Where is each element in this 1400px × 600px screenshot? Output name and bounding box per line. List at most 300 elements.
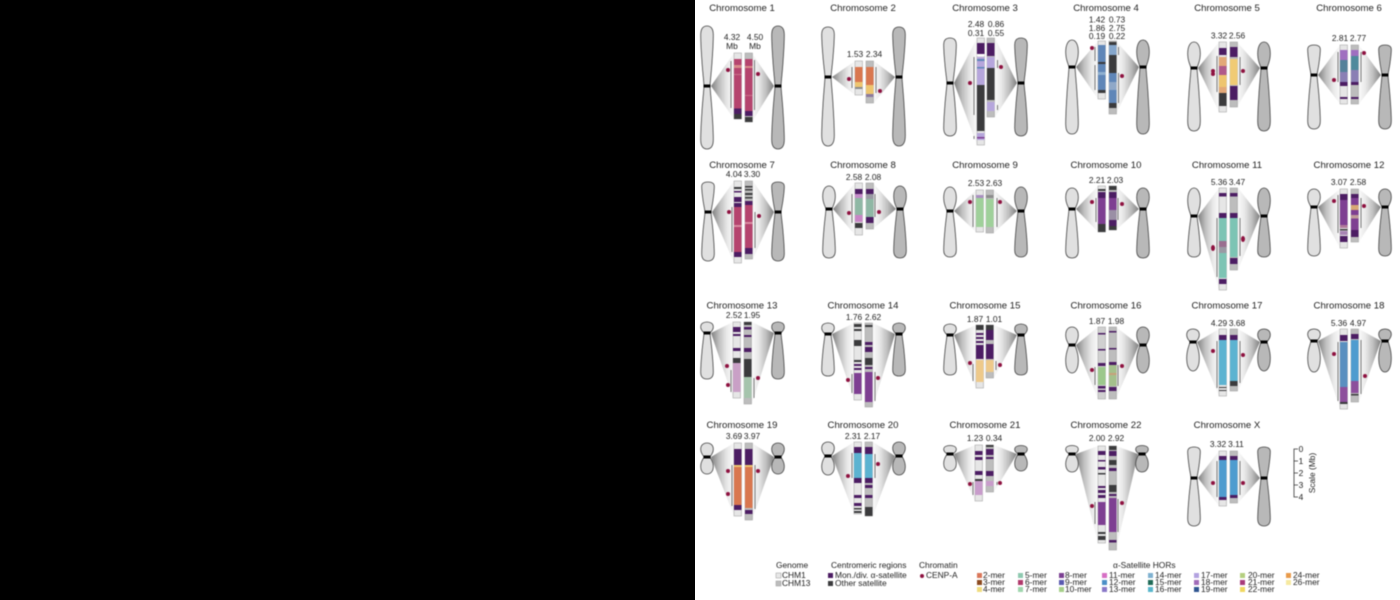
sizes: [1211, 318, 1245, 328]
CHM1 chromosome: [1066, 446, 1078, 472]
zoom fans: [832, 442, 895, 516]
brackets and CENP-A: [726, 60, 760, 110]
zoom fans: [1198, 188, 1260, 290]
brackets and CENP-A: [725, 364, 760, 398]
sizes: 0.86: [988, 19, 1004, 29]
legend: alpha-satellite HORs: 22-mer: [1248, 584, 1275, 594]
brackets and CENP-A: [968, 481, 1002, 495]
CHM13 chromosome: [1258, 42, 1270, 131]
CHM1 chromosome: [1308, 189, 1320, 256]
panel: chromosome 3: [944, 3, 1027, 145]
panel: chromosome 2: [822, 3, 905, 146]
zoom fans: [1198, 42, 1260, 112]
CHM13 array: [865, 442, 872, 516]
CHM1 array: [734, 53, 742, 119]
sizes: [967, 433, 1002, 443]
title: Chromosome 3: [952, 3, 1018, 14]
brackets and CENP-A: [1090, 499, 1124, 532]
sizes: Mb: [726, 41, 738, 51]
CHM1 array: [975, 445, 982, 501]
sizes: 2.62: [865, 312, 881, 322]
legend: alpha-satellite HORs: 15-mer: [1155, 577, 1182, 587]
CHM13 chromosome: [1137, 188, 1149, 258]
legend: alpha-satellite HORs: 9-mer: [1065, 577, 1087, 587]
sizes: 2.92: [1108, 433, 1124, 443]
CHM13 array: [1230, 451, 1238, 503]
sizes: [1211, 30, 1245, 40]
CHM1 array: [1219, 451, 1226, 506]
title: Chromosome 5: [1194, 3, 1260, 14]
scale bar: 0: [1299, 444, 1304, 454]
scale bar: Scale (Mb): [1307, 453, 1317, 493]
panel: chromosome 16: [1066, 300, 1149, 399]
zoom fans: [833, 183, 896, 235]
CHM1 chromosome: [1308, 45, 1320, 129]
CHM13 array: [1230, 42, 1238, 107]
legend: alpha-satellite HORs: 14-mer: [1155, 570, 1182, 580]
CHM13 chromosome: [1015, 187, 1027, 257]
title: Chromosome 16: [1071, 300, 1141, 312]
panel: chromosome 17: [1187, 300, 1270, 396]
CHM13 array: [1351, 329, 1358, 402]
zoom fans: [711, 443, 774, 520]
CHM13 chromosome: [1258, 447, 1270, 526]
sizes: [968, 178, 1002, 188]
scale bar: 4: [1299, 492, 1304, 502]
brackets and CENP-A: [968, 195, 1002, 227]
CHM1 chromosome: [944, 324, 956, 375]
CHM1 chromosome: [1066, 40, 1078, 134]
sizes: [967, 314, 1002, 324]
figure: [701, 3, 1391, 594]
sizes: 2.58: [846, 172, 862, 182]
CHM13 array: [865, 323, 872, 407]
sizes: 2.58: [1350, 177, 1366, 187]
CHM13 array: [745, 53, 752, 122]
sizes: [845, 431, 880, 441]
panel: chromosome 7: [702, 160, 784, 263]
CHM13 array: [986, 445, 994, 492]
CHM1 chromosome: [1188, 188, 1200, 257]
CHM13 array: [1351, 189, 1358, 242]
sizes: 2.31: [845, 431, 861, 441]
CHM1 chromosome: [1187, 329, 1199, 371]
CHM1 chromosome: [1188, 42, 1200, 131]
legend: alpha-satellite HORs: 19-mer: [1201, 584, 1228, 594]
sizes: 3.68: [1229, 318, 1245, 328]
CHM13 array: [866, 183, 874, 229]
legend: alpha-satellite HORs: 12-mer: [1109, 577, 1136, 587]
brackets and CENP-A: [1090, 198, 1124, 222]
sizes: 3.97: [744, 431, 760, 441]
zoom fans: [711, 53, 774, 122]
legend: chromatin: CENP-A: [926, 570, 958, 580]
zoom fans: [1198, 451, 1260, 506]
title: Chromosome 22: [1071, 420, 1141, 431]
legend: centromeric regions: Centromeric regions: [831, 560, 906, 570]
zoom fans: [954, 190, 1017, 233]
scale bar: [1294, 444, 1317, 502]
title: Chromosome 17: [1192, 300, 1262, 312]
sizes: [1211, 177, 1245, 187]
CHM13 chromosome: [1258, 329, 1270, 371]
CHM13 chromosome: [1379, 189, 1391, 256]
panel: chromosome 20: [822, 420, 905, 516]
brackets and CENP-A: [1211, 341, 1245, 388]
sizes: 2.00: [1089, 433, 1105, 443]
sizes: [1089, 175, 1123, 185]
CHM1 chromosome: [702, 182, 714, 261]
title: Chromosome 19: [707, 420, 777, 431]
legend: alpha-satellite HORs: 16-mer: [1155, 584, 1182, 594]
CHM13 chromosome: [893, 442, 905, 475]
zoom fans: [1318, 45, 1381, 104]
sizes: 4.04: [726, 169, 742, 179]
brackets and CENP-A: [1090, 364, 1124, 386]
panel: chromosome 14: [822, 300, 905, 407]
CHM1 array: [855, 61, 862, 95]
brackets and CENP-A: [846, 372, 880, 401]
panel: chromosome 10: [1066, 160, 1149, 258]
CHM13 chromosome: [1137, 327, 1149, 373]
CHM13 array: [987, 38, 994, 117]
legend: alpha-satellite HORs: 26-mer: [1293, 577, 1320, 587]
sizes: 3.32: [1211, 30, 1227, 40]
CHM1 array: [977, 38, 984, 145]
title: Chromosome 12: [1314, 160, 1384, 171]
brackets and CENP-A: [726, 465, 760, 509]
legend: alpha-satellite HORs: [977, 560, 1320, 594]
legend: alpha-satellite HORs: 21-mer: [1248, 577, 1275, 587]
CHM1 chromosome: [701, 26, 713, 149]
CHM13 array: [1109, 186, 1116, 230]
sizes: 1.76: [846, 312, 862, 322]
panel: chromosome X: [1188, 420, 1270, 526]
panel: chromosome 9: [944, 160, 1027, 257]
sizes: 2.77: [1350, 33, 1366, 43]
sizes: [1089, 316, 1124, 326]
CHM1 array: [734, 443, 742, 516]
CHM1 array: [976, 190, 984, 232]
CHM1 chromosome: [822, 323, 834, 376]
CHM1 chromosome: [823, 186, 835, 258]
sizes: 2.75: [1109, 23, 1125, 33]
CHM13 chromosome: [893, 323, 905, 376]
sizes: 5.36: [1331, 318, 1347, 328]
sizes: [1210, 439, 1244, 449]
sizes: 1.87: [967, 314, 983, 324]
CHM13 array: [986, 325, 994, 378]
CHM13 chromosome: [894, 186, 906, 258]
sizes: [846, 172, 881, 182]
CHM1 chromosome: [944, 38, 956, 136]
legend: alpha-satellite HORs: 6-mer: [1025, 577, 1047, 587]
brackets and CENP-A: [846, 453, 880, 478]
CHM1 array: [1340, 45, 1348, 104]
title: Chromosome 2: [830, 3, 896, 14]
CHM1 array: [854, 442, 862, 514]
panel: chromosome 18: [1308, 300, 1391, 409]
sizes: [1332, 33, 1366, 43]
CHM13 chromosome: [893, 27, 905, 146]
title: Chromosome 18: [1314, 300, 1384, 312]
title: Chromosome 14: [828, 300, 899, 312]
title: Chromosome 21: [950, 420, 1020, 431]
zoom fans: [1076, 186, 1139, 232]
zoom fans: [954, 38, 1017, 145]
CHM1 array: [1219, 329, 1226, 396]
sizes: 1.98: [1108, 316, 1124, 326]
title: Chromosome 11: [1192, 160, 1262, 171]
panel: chromosome 22: [1066, 420, 1148, 550]
legend: alpha-satellite HORs: 18-mer: [1201, 577, 1228, 587]
legend: genome: CHM1: [782, 570, 806, 580]
sizes: [847, 49, 882, 59]
CHM1 chromosome: [701, 443, 713, 474]
sizes: 2.21: [1089, 175, 1105, 185]
scale bar: 1: [1299, 456, 1304, 466]
zoom fans: [1076, 41, 1139, 114]
CHM1 chromosome: [701, 322, 713, 379]
CHM13 chromosome: [772, 182, 784, 261]
scale bar: 2: [1299, 468, 1304, 478]
CHM1 array: [855, 183, 862, 235]
brackets and CENP-A: [847, 67, 882, 93]
brackets and CENP-A: [1090, 46, 1124, 103]
CHM13 array: [745, 181, 752, 259]
CHM13 array: [1109, 327, 1116, 399]
brackets and CENP-A: [1211, 56, 1245, 92]
CHM1 chromosome: [944, 187, 956, 257]
sizes: 3.32: [1210, 439, 1226, 449]
brackets and CENP-A: [1332, 340, 1367, 401]
legend: alpha-satellite HORs: 5-mer: [1025, 570, 1047, 580]
panel: chromosome 19: [701, 420, 784, 520]
zoom fans: [1197, 329, 1260, 396]
CHM13 array: [745, 443, 752, 520]
title: Chromosome X: [1194, 420, 1261, 431]
zoom fans: [954, 325, 1017, 388]
panel: chromosome 4: [1066, 3, 1149, 134]
legend: chromatin: [919, 560, 958, 580]
sizes: 2.03: [1107, 175, 1123, 185]
CHM1 chromosome: [1308, 329, 1320, 372]
sizes: 1.01: [986, 314, 1002, 324]
sizes: 0.73: [1109, 14, 1125, 24]
legend: genome: [776, 560, 811, 588]
sizes: 3.47: [1229, 177, 1245, 187]
CHM13 chromosome: [1015, 446, 1027, 471]
CHM13 array: [986, 190, 994, 233]
panel: chromosome 8: [823, 160, 906, 258]
panel: chromosome 5: [1188, 3, 1270, 131]
panel: chromosome 21: [944, 420, 1027, 501]
zoom fans: [711, 322, 774, 404]
brackets and CENP-A: [968, 57, 1003, 139]
sizes: 3.30: [744, 169, 760, 179]
sizes: 5.36: [1211, 177, 1227, 187]
panel: chromosome 6: [1308, 3, 1391, 129]
zoom fans: [1318, 189, 1381, 248]
legend: alpha-satellite HORs: 3-mer: [983, 577, 1005, 587]
legend: alpha-satellite HORs: 8-mer: [1065, 570, 1087, 580]
zoom fans: [832, 61, 895, 103]
sizes: 0.31: [968, 28, 984, 38]
zoom fans: [1318, 329, 1381, 409]
zoom fans: [832, 323, 895, 407]
CHM13 chromosome: [1015, 38, 1027, 136]
CHM13 chromosome: [1136, 446, 1148, 472]
panel: chromosome 13: [701, 300, 784, 404]
title: Chromosome 8: [830, 160, 896, 171]
sizes: 2.48: [968, 19, 984, 29]
panel: chromosome 12: [1308, 160, 1391, 256]
legend: alpha-satellite HORs: 11-mer: [1109, 570, 1135, 580]
legend: alpha-satellite HORs: 24-mer: [1293, 570, 1320, 580]
sizes: 2.08: [865, 172, 881, 182]
CHM1 chromosome: [944, 446, 956, 471]
CHM13 array: [744, 322, 752, 404]
sizes: 3.69: [726, 431, 742, 441]
CHM13 array: [866, 61, 874, 103]
sizes: 1.42: [1089, 14, 1105, 24]
CHM13 array: [1230, 329, 1238, 391]
CHM1 array: [1098, 41, 1106, 99]
title: Chromosome 10: [1071, 160, 1141, 171]
sizes: 2.53: [968, 178, 984, 188]
scale bar: 3: [1299, 480, 1304, 490]
CHM1 array: [1340, 189, 1348, 248]
sizes: [726, 431, 760, 441]
sizes: [726, 310, 760, 320]
legend: alpha-satellite HORs: 20-mer: [1248, 570, 1275, 580]
sizes: [1089, 433, 1124, 443]
sizes: 4.29: [1211, 318, 1227, 328]
sizes: [968, 19, 1004, 38]
sizes: [1331, 318, 1366, 328]
sizes: 1.95: [744, 310, 760, 320]
sizes: 4.97: [1350, 318, 1366, 328]
CHM1 array: [733, 322, 740, 398]
brackets and CENP-A: [847, 194, 881, 223]
CHM1 array: [1219, 188, 1226, 290]
sizes: [726, 169, 760, 179]
CHM13 chromosome: [1015, 324, 1027, 375]
legend: alpha-satellite HORs: 7-mer: [1025, 584, 1047, 594]
CHM1 array: [1219, 42, 1226, 112]
CHM1 array: [1098, 327, 1106, 399]
sizes: 0.22: [1109, 31, 1125, 41]
CHM13 chromosome: [1379, 329, 1391, 372]
legend: alpha-satellite HORs: 17-mer: [1201, 570, 1228, 580]
legend: centromeric regions: Other satellite: [835, 578, 887, 588]
zoom fans: [1076, 327, 1139, 399]
legend: alpha-satellite HORs: 13-mer: [1109, 584, 1136, 594]
brackets and CENP-A: [1211, 218, 1245, 277]
panel: chromosome 11: [1188, 160, 1270, 290]
sizes: 1.87: [1089, 316, 1105, 326]
CHM1 array: [854, 323, 862, 400]
brackets and CENP-A: [968, 361, 1002, 381]
CHM13 array: [1109, 41, 1116, 114]
brackets and CENP-A: [1332, 51, 1366, 82]
legend: alpha-satellite HORs: 4-mer: [983, 584, 1005, 594]
CHM13 array: [1351, 45, 1358, 104]
sizes: 2.81: [1332, 33, 1348, 43]
sizes: [1331, 177, 1366, 187]
title: Chromosome 1: [709, 3, 775, 14]
legend: alpha-satellite HORs: α-Satellite HORs: [1113, 560, 1176, 570]
CHM13 array: [1109, 446, 1116, 550]
CHM1 chromosome: [822, 27, 834, 146]
sizes: 2.34: [866, 49, 882, 59]
sizes: 4.50: [747, 32, 763, 42]
legend: genome: Genome: [776, 560, 808, 570]
legend: alpha-satellite HORs: 10-mer: [1065, 584, 1092, 594]
CHM1 array: [1340, 329, 1348, 409]
CHM1 chromosome: [822, 442, 834, 475]
CHM1 chromosome: [1066, 327, 1078, 373]
title: Chromosome 4: [1073, 3, 1139, 14]
sizes: 1.53: [847, 49, 863, 59]
CHM13 chromosome: [1379, 45, 1391, 129]
CHM1 chromosome: [1066, 188, 1078, 258]
white figure area: [695, 0, 1400, 600]
sizes: [846, 312, 881, 322]
zoom fans: [1076, 446, 1138, 550]
panel: chromosome 1: [701, 3, 784, 149]
CHM1 array: [1098, 446, 1106, 543]
panel: chromosome 15: [944, 300, 1027, 388]
zoom fans: [712, 181, 774, 263]
sizes: 2.63: [986, 178, 1002, 188]
legend: centromeric regions: Mon./div. α-satellite: [835, 570, 907, 580]
sizes: 3.11: [1228, 439, 1244, 449]
CHM13 chromosome: [1137, 40, 1149, 134]
sizes: 2.17: [864, 431, 880, 441]
legend: chromatin: Chromatin: [919, 560, 958, 570]
title: Chromosome 6: [1316, 3, 1382, 14]
legend: alpha-satellite HORs: 2-mer: [983, 570, 1005, 580]
sizes: 1.86: [1089, 23, 1105, 33]
CHM13 array: [1230, 188, 1238, 270]
sizes: 2.56: [1229, 30, 1245, 40]
legend: genome: CHM13: [782, 578, 811, 588]
sizes: 0.55: [988, 28, 1004, 38]
sizes: 3.07: [1331, 177, 1347, 187]
brackets and CENP-A: [1332, 195, 1366, 233]
legend: centromeric regions: [828, 560, 907, 588]
sizes: [724, 32, 763, 51]
CHM1 array: [1098, 186, 1106, 232]
sizes: 2.52: [726, 310, 742, 320]
title: Chromosome 9: [952, 160, 1018, 171]
CHM1 array: [976, 325, 984, 388]
sizes: [1089, 14, 1125, 41]
CHM13 chromosome: [772, 322, 784, 379]
title: Chromosome 15: [950, 300, 1020, 312]
brackets and CENP-A: [727, 207, 761, 252]
sizes: 4.32: [724, 32, 740, 42]
sizes: 1.23: [967, 433, 983, 443]
sizes: 0.34: [986, 433, 1002, 443]
CHM13 chromosome: [772, 26, 784, 149]
title: Chromosome 7: [709, 160, 775, 171]
title: Chromosome 20: [828, 420, 898, 431]
zoom fans: [954, 445, 1017, 501]
CHM13 chromosome: [772, 443, 784, 474]
sizes: Mb: [749, 41, 761, 51]
